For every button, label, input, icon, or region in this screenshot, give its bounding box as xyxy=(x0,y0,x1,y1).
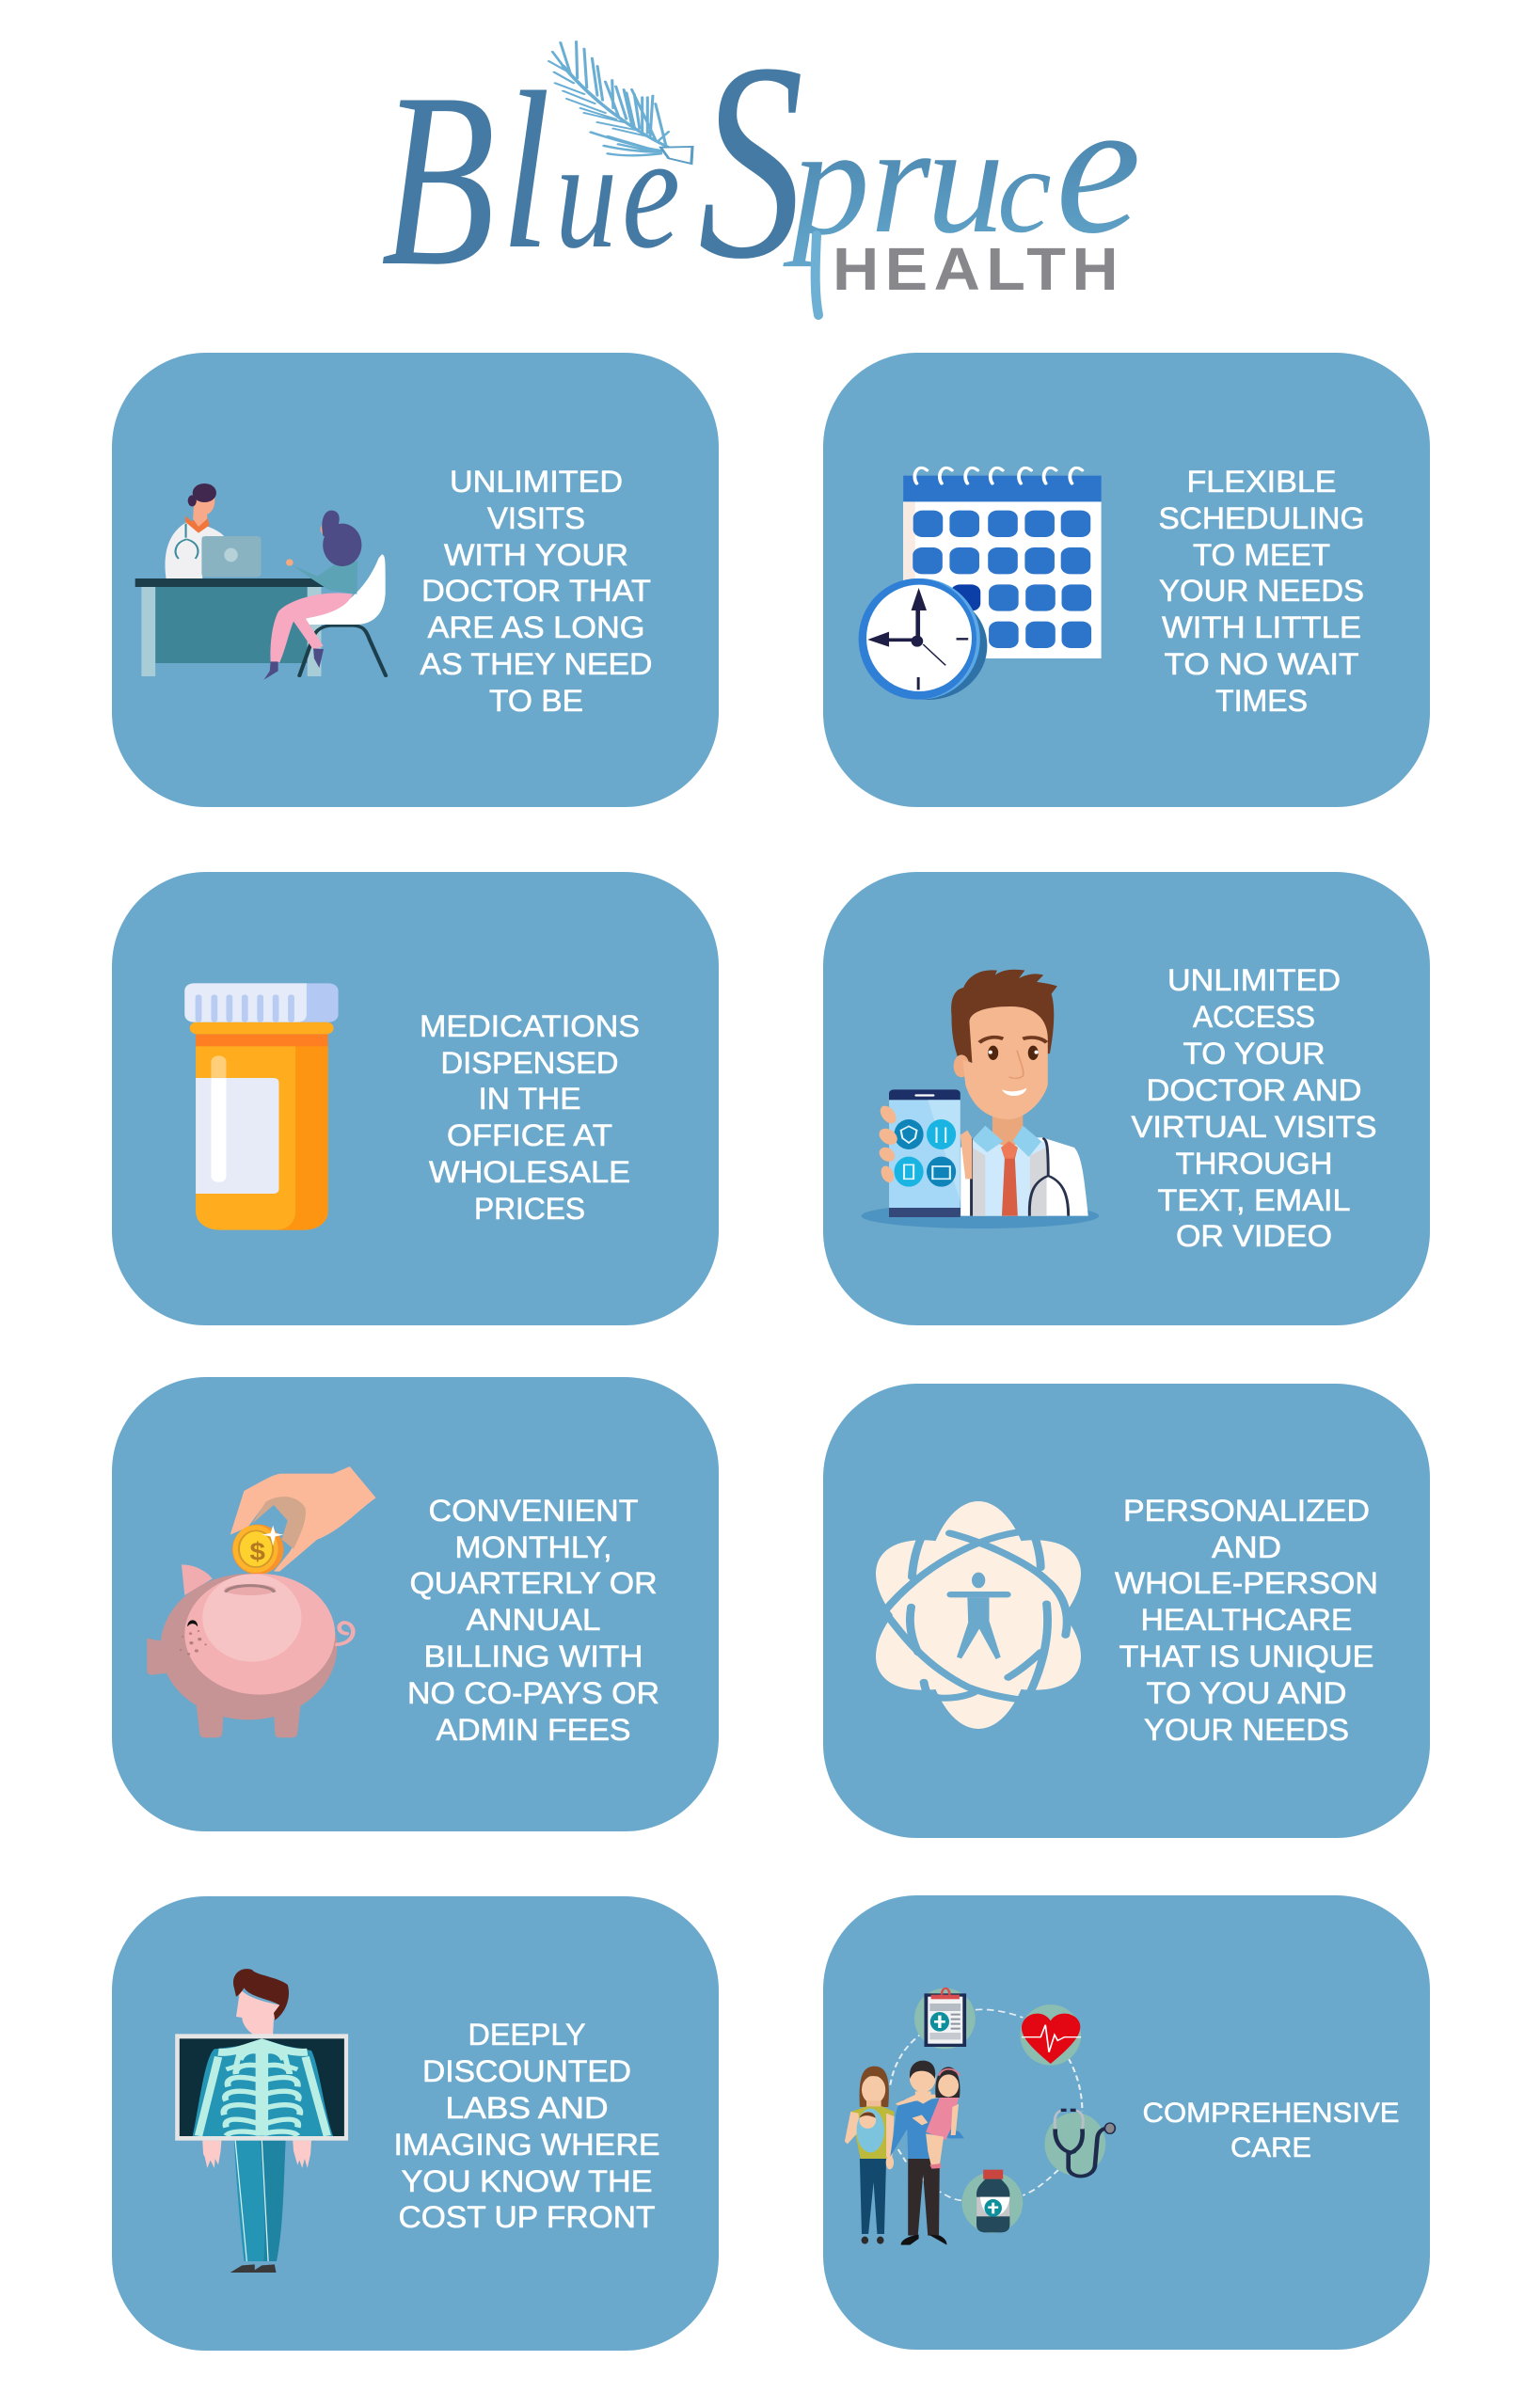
icon: pill bottle xyxy=(184,983,339,1230)
text: labs and imaging xyxy=(393,2018,660,2234)
panel: unlimited visits xyxy=(112,353,719,807)
text: billing xyxy=(407,1494,659,1747)
text: unlimited access xyxy=(1131,963,1377,1253)
text: medications: DISPENSED xyxy=(440,1046,619,1080)
logo wordmark script: Spruce: e xyxy=(1056,60,1141,274)
text: flexible scheduling: TO NO WAIT xyxy=(1165,647,1358,681)
text: flexible scheduling: SCHEDULING xyxy=(1159,501,1364,535)
panel: medications xyxy=(112,872,719,1325)
text: unlimited access: DOCTOR AND xyxy=(1146,1073,1362,1107)
logo wordmark script: Spruce xyxy=(698,6,1141,318)
text: unlimited visits: UNLIMITED xyxy=(450,465,623,499)
text: medications: IN THE xyxy=(478,1082,581,1116)
text: personalized care xyxy=(1115,1494,1378,1747)
logo wordmark script: Blue: B xyxy=(381,41,495,318)
text: medications: PRICES xyxy=(474,1192,585,1226)
text: billing: NO CO-PAYS OR xyxy=(407,1676,659,1710)
text: unlimited visits: WITH YOUR xyxy=(444,538,628,572)
text: flexible scheduling: FLEXIBLE xyxy=(1187,465,1336,499)
text: personalized care: AND xyxy=(1212,1530,1281,1564)
text: billing: MONTHLY, xyxy=(455,1530,611,1564)
logo wordmark script: Spruce: c xyxy=(997,123,1052,259)
icon: doctor holding phone xyxy=(862,970,1099,1228)
panel: comprehensive care xyxy=(823,1895,1430,2350)
text: unlimited visits: VISITS xyxy=(487,501,585,535)
father and daughter xyxy=(890,2061,964,2245)
text: personalized care: PERSONALIZED xyxy=(1123,1494,1370,1528)
text: medications xyxy=(420,1009,640,1226)
text: unlimited access: ACCESS xyxy=(1193,1000,1315,1034)
text: labs and imaging: YOU KNOW THE xyxy=(401,2164,653,2198)
text: flexible scheduling: WITH LITTLE xyxy=(1162,610,1361,644)
text: billing: QUARTERLY OR xyxy=(410,1566,657,1600)
logo wordmark script: Spruce: p xyxy=(783,95,869,267)
text: unlimited access: UNLIMITED xyxy=(1167,963,1341,997)
text: personalized care: WHOLE-PERSON xyxy=(1115,1566,1378,1600)
text: flexible scheduling: YOUR NEEDS xyxy=(1159,574,1364,608)
text: comprehensive care: COMPREHENSIVE xyxy=(1142,2098,1400,2129)
icon: whole person atom xyxy=(851,1501,1105,1729)
panel: personalized care xyxy=(823,1384,1430,1838)
text: labs and imaging: COST UP FRONT xyxy=(399,2200,655,2234)
text: unlimited access: TEXT, EMAIL xyxy=(1157,1183,1351,1217)
icon: piggy bank and coin xyxy=(147,1466,376,1737)
text: labs and imaging: DISCOUNTED xyxy=(422,2054,631,2088)
text: labs and imaging: IMAGING WHERE xyxy=(393,2128,660,2162)
text: unlimited visits: ARE AS LONG xyxy=(427,610,645,644)
text: unlimited access: OR VIDEO xyxy=(1176,1219,1332,1253)
text: unlimited access: VIRTUAL VISITS xyxy=(1131,1110,1377,1144)
logo subtitle: HEALTH xyxy=(833,235,1124,303)
panel: labs and imaging xyxy=(112,1896,719,2351)
text: flexible scheduling: TO MEET xyxy=(1193,538,1330,572)
logo wordmark script: Spruce: r xyxy=(870,93,931,265)
text: medications: MEDICATIONS xyxy=(420,1009,640,1043)
text: unlimited access: THROUGH xyxy=(1176,1147,1332,1180)
text: personalized care: YOUR NEEDS xyxy=(1144,1713,1349,1747)
panel: flexible scheduling xyxy=(823,353,1430,807)
icon: x-ray figure xyxy=(175,1969,348,2273)
panel: billing xyxy=(112,1377,719,1831)
text: personalized care: THAT IS UNIQUE xyxy=(1119,1640,1373,1673)
text: unlimited visits xyxy=(420,465,653,718)
text: unlimited visits: DOCTOR THAT xyxy=(421,574,651,608)
text: unlimited access: TO YOUR xyxy=(1183,1037,1325,1070)
icon: calendar and clock xyxy=(859,467,1102,700)
logo xyxy=(381,6,1141,318)
panel: unlimited access xyxy=(823,872,1430,1325)
text: billing: CONVENIENT xyxy=(429,1494,638,1528)
logo wordmark script: Spruce: u xyxy=(927,93,1005,265)
text: flexible scheduling xyxy=(1159,465,1364,718)
icon: doctor and patient at desk xyxy=(135,483,386,680)
text: medications: WHOLESALE xyxy=(429,1155,630,1189)
logo wordmark script: Blue: lue xyxy=(500,46,680,296)
text: comprehensive care: CARE xyxy=(1230,2132,1311,2163)
icon: piggy bank and coin: $ xyxy=(250,1537,265,1565)
text: billing: ADMIN FEES xyxy=(437,1713,630,1747)
text: labs and imaging: LABS AND xyxy=(446,2091,608,2125)
text: unlimited visits: TO BE xyxy=(489,684,583,718)
logo wordmark script: Blue xyxy=(381,41,680,318)
text: flexible scheduling: TIMES xyxy=(1215,684,1308,718)
text: personalized care: TO YOU AND xyxy=(1146,1676,1347,1710)
logo wordmark script: Spruce: S xyxy=(698,6,804,318)
text: labs and imaging: DEEPLY xyxy=(468,2018,585,2052)
icon: family and care cycle xyxy=(845,1988,1115,2245)
text: comprehensive care xyxy=(1142,2098,1400,2163)
mother xyxy=(845,2067,894,2244)
icon: spruce sprig xyxy=(548,41,692,164)
text: medications: OFFICE AT xyxy=(447,1118,612,1152)
text: personalized care: HEALTHCARE xyxy=(1140,1603,1353,1637)
text: unlimited visits: AS THEY NEED xyxy=(420,647,653,681)
text: billing: ANNUAL xyxy=(467,1603,600,1637)
text: billing: BILLING WITH xyxy=(423,1640,643,1673)
